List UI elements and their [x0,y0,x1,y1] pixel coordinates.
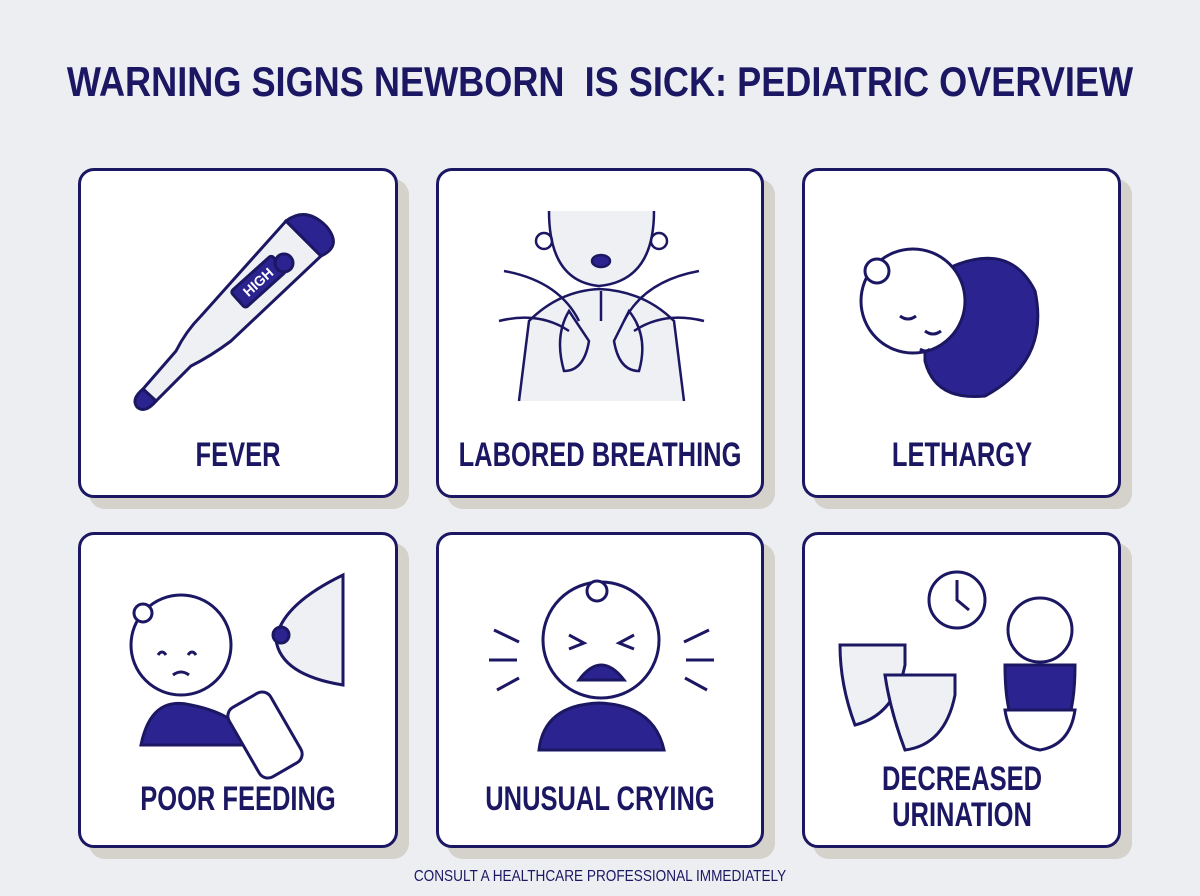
panel: poor feeding [78,532,398,848]
label: UNUSUAL CRYING [485,780,715,818]
icon: diapers clock baby [838,570,1077,752]
icon: baby bottle breast [130,572,344,780]
icon: baby chest lungs [498,211,704,402]
panel: labored breathing [436,168,764,498]
label [881,760,1042,834]
icon: sleeping baby [860,248,1040,398]
panel: unusual crying [436,532,764,848]
label: POOR FEEDING [140,780,336,818]
label: URINATION [892,796,1031,834]
footer note: CONSULT A HEALTHCARE PROFESSIONAL IMMEDIATELY [414,868,786,885]
icon: thermometer [133,213,335,411]
label: DECREASED [881,760,1042,798]
label: LABORED BREATHING [459,436,741,474]
label: LETHARGY [891,436,1032,474]
panel: lethargy [802,168,1121,498]
panel: fever [78,168,398,498]
title: WARNING SIGNS NEWBORN IS SICK: PEDIATRIC OVERVIEW [67,58,1133,105]
icon: thermometer: HIGH [240,264,276,300]
panel: decreased urination [802,532,1121,848]
label: FEVER [195,436,281,474]
icon: crying baby [489,580,714,752]
